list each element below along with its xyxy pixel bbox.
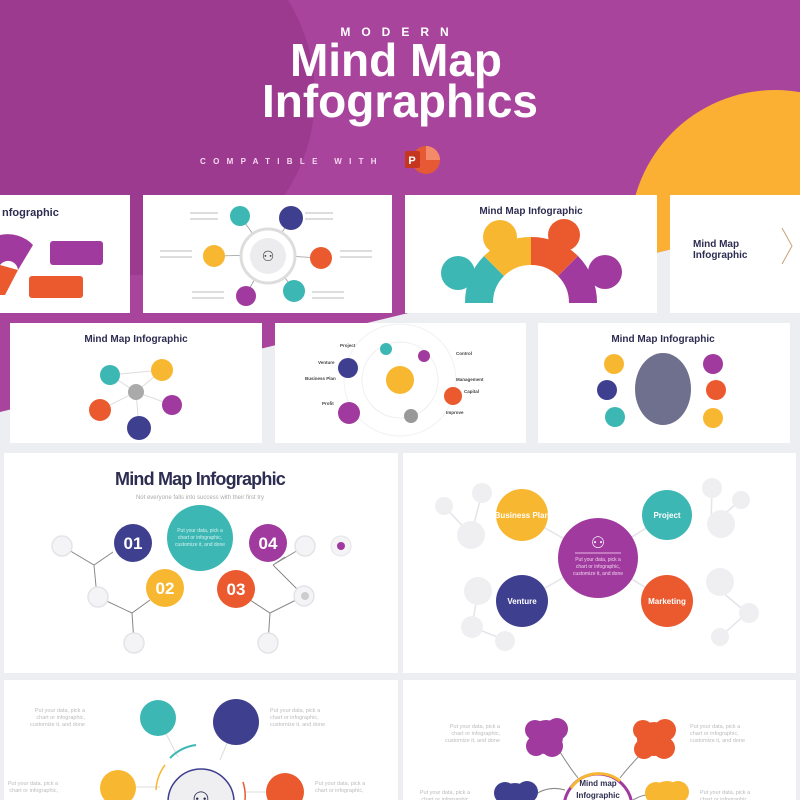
panel: brain mind map (bottom left): chart or infographic, [9,788,58,794]
panel: numbered mind map: customize it, and done [175,542,225,548]
panel: cloud mind map (bottom right): customize it, and done [690,738,745,744]
purple background [0,0,800,412]
row2 card 2: orbit: Capital [464,389,479,394]
panel: cloud mind map (bottom right): chart or infographic, [690,731,739,737]
panel: numbered mind map: 01 [124,534,142,553]
panel: cloud mind map (bottom right): Infographic [576,791,620,800]
title: Mind Map [290,34,502,86]
panel: cloud mind map (bottom right): Put your data, pick a [690,724,741,730]
panel: brain mind map (bottom left) [4,680,398,800]
panel: numbered mind map: 03 [227,580,245,599]
panel: brain mind map (bottom left): chart or infographic, [36,715,85,721]
orange circle decoration [636,90,800,253]
compatible with powerpoint: P [408,155,416,167]
panel: cloud mind map (bottom right): Mind map [579,779,617,788]
card B: brain wheel [143,195,392,313]
panel: business mind map: Business Plan [495,511,549,520]
panel: brain mind map (bottom left): customize it, and done [30,722,85,728]
dark circle decoration [0,0,315,275]
title [265,42,536,126]
row2 card 2: orbit [275,323,526,443]
row2 card 2: orbit: Venture [318,360,335,365]
panel: cloud mind map (bottom right): chart or infographic, [451,731,500,737]
compatible with powerpoint: COMPATIBLE WITH [200,157,384,166]
panel: cloud mind map (bottom right): customize it, and done [445,738,500,744]
panel: cloud mind map (bottom right): Put your data, pick a [450,724,501,730]
card D: title slide partial [670,195,800,313]
row2 card 1 [10,323,262,443]
panel: numbered mind map: Put your data, pick a [177,528,223,534]
title: Infographics [262,75,538,127]
row2 card 3 [538,323,790,443]
panel: business mind map: Venture [507,597,537,606]
panel: numbered mind map: chart or infographic, [178,535,222,541]
card A: partial callout slide [0,195,130,313]
panel: business mind map: customize it, and done [573,571,623,577]
panel: cloud mind map (bottom right): Put your data, pick a [420,790,471,796]
panel: business mind map: ⚇ [591,535,605,552]
panel: brain mind map (bottom left): chart or infographic, [315,788,364,794]
row2 card 2: orbit: Business Plan [305,376,336,381]
row2 card 2: orbit: Project [340,343,356,348]
row2 card 3: Mind Map Infographic [611,334,715,345]
panel: brain mind map (bottom left): Put your data, pick a [35,708,86,714]
row2 card 2: orbit: Profit [322,401,334,406]
panel: numbered mind map: 04 [259,534,278,553]
card C: semicircle mind map: Mind Map Infographic [479,206,583,217]
panel: business mind map: Project [653,511,681,520]
panel: brain mind map (bottom left): Put your data, pick a [8,781,59,787]
row2 card 2: orbit: Management [456,377,484,382]
card B: brain wheel: ⚇ [262,248,274,264]
row2 card 2: orbit: Control [456,351,472,356]
panel: business mind map: Marketing [648,597,686,606]
panel: numbered mind map: Mind Map Infographic [115,469,286,489]
panel: numbered mind map: Not everyone falls into success with their first try [136,495,264,501]
panel: brain mind map (bottom left): chart or infographic, [270,715,319,721]
compatible with powerpoint [200,146,440,174]
row2 card 1: Mind Map Infographic [84,334,188,345]
panel: business mind map [403,453,796,673]
card D: title slide partial: Infographic [693,250,748,261]
heading: MODERN: MODERN [340,25,460,39]
card C: semicircle mind map [405,195,657,313]
card A: partial callout slide: nfographic [2,207,59,219]
panel: cloud mind map (bottom right): Put your data, pick a [700,790,751,796]
row2 card 2: orbit: Improve [446,410,464,415]
panel: numbered mind map [4,453,398,673]
panel: cloud mind map (bottom right) [403,680,796,800]
panel: business mind map: chart or infographic, [576,564,620,570]
panel: brain mind map (bottom left): Put your data, pick a [315,781,366,787]
panel: brain mind map (bottom left): customize it, and done [270,722,325,728]
panel: numbered mind map: 02 [156,579,174,598]
panel: business mind map: Put your data, pick a [575,557,621,563]
card D: title slide partial: Mind Map [693,239,739,250]
panel: brain mind map (bottom left): Put your data, pick a [270,708,321,714]
